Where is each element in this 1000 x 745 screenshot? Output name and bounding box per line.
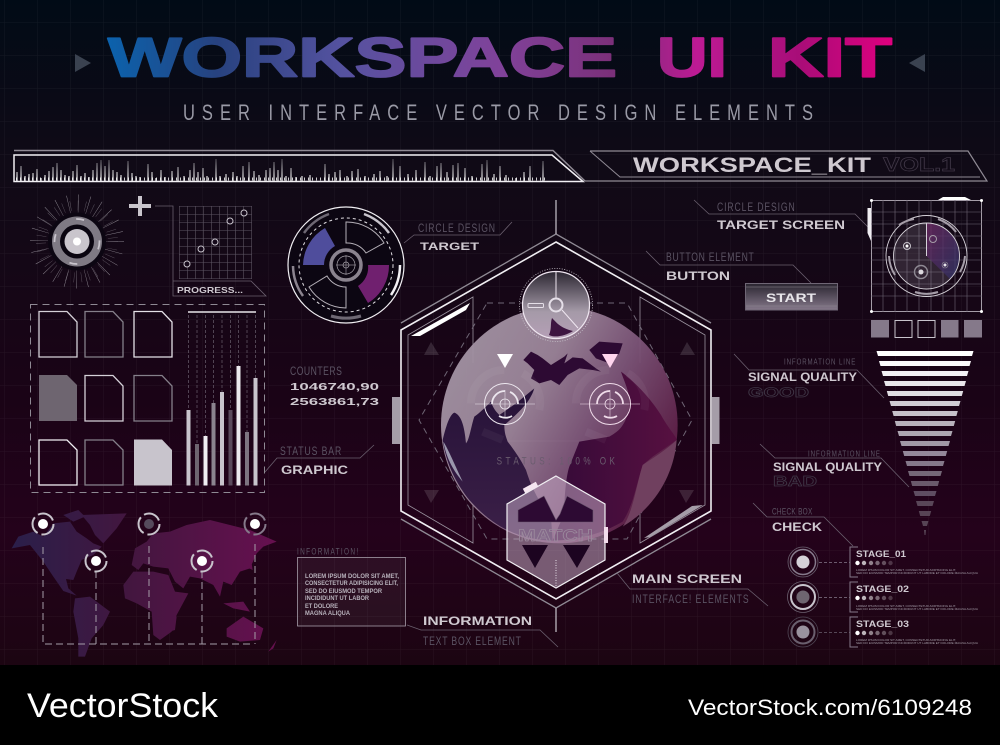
footer bar — [0, 665, 1000, 745]
label: check — [753, 503, 853, 546]
title: KIT — [768, 26, 892, 88]
label: information: INFORMATION — [423, 616, 532, 628]
match hexagon: MATCH — [518, 526, 593, 545]
stage 03: LOREM IPSUM DOLOR SIT AMET, CONSECTETUR ADIPISICING ELIT, — [856, 638, 956, 642]
counters: 2563861,73 — [290, 396, 379, 408]
world map — [12, 510, 277, 657]
label: signal quality good: GOOD — [748, 384, 809, 400]
top lens — [520, 268, 592, 342]
information box: CONSECTETUR ADIPISICING ELIT, — [305, 580, 398, 587]
icon: plus — [129, 196, 151, 216]
main screen hexagon — [392, 200, 720, 632]
right target — [580, 384, 640, 424]
label: target screen: TARGET SCREEN — [717, 220, 845, 232]
counters: COUNTERS — [290, 366, 342, 378]
counters: 1046740,90 — [290, 381, 379, 393]
hexagon frame — [401, 200, 711, 632]
title — [108, 26, 892, 88]
label: main screen: INTERFACE! ELEMENTS — [632, 594, 749, 606]
stage 01: SED DO EIUSMOD TEMPOR INCIDIDUNT UT LABORE ET DOLORE MAGNA ALIQUA — [856, 571, 978, 575]
workspace kit label — [585, 151, 987, 181]
black sea — [589, 342, 623, 363]
button: start: START — [766, 293, 816, 305]
marker triangles — [497, 354, 618, 368]
information box: INCIDIDUNT UT LABOR — [305, 595, 369, 602]
highlights — [411, 303, 470, 336]
label: target: TARGET — [420, 241, 479, 253]
stage 02: STAGE_02 — [856, 584, 909, 594]
label: target screen — [694, 200, 872, 232]
label: target — [404, 222, 512, 253]
information box: INFORMATION! — [297, 546, 358, 557]
workspace kit label: VOL.1 — [883, 155, 956, 176]
left target — [475, 384, 535, 424]
signal funnel — [876, 351, 974, 535]
footer bar: VectorStock — [27, 687, 219, 725]
target screen radar — [868, 197, 983, 313]
workspace kit label: WORKSPACE_KIT — [633, 154, 871, 177]
label: signal quality good: SIGNAL QUALITY — [748, 372, 857, 384]
title: UI — [657, 26, 727, 88]
atlantic ocean — [443, 388, 553, 541]
match hexagon — [507, 476, 608, 588]
stage 02: SED DO EIUSMOD TEMPOR INCIDIDUNT UT LABORE ET DOLORE MAGNA ALIQUA — [856, 607, 978, 611]
label: check: CHECK BOX — [772, 506, 813, 517]
information box — [297, 546, 406, 626]
label: graphic status bar — [265, 445, 374, 477]
label: signal quality bad: INFORMATION LINE — [808, 448, 880, 459]
circle target gauge — [288, 207, 404, 323]
globe — [441, 307, 678, 543]
stage 03: STAGE_03 — [856, 619, 909, 629]
stage 01: LOREM IPSUM DOLOR SIT AMET, CONSECTETUR ADIPISICING ELIT, — [856, 568, 956, 572]
label: button: BUTTON ELEMENT — [666, 252, 754, 264]
label: main screen — [617, 573, 768, 606]
label: target: CIRCLE DESIGN — [418, 223, 495, 235]
label: graphic status bar: GRAPHIC — [281, 465, 348, 477]
status text: STATUS: 100% OK — [497, 455, 615, 468]
label: signal quality good: INFORMATION LINE — [784, 356, 855, 367]
label: information — [407, 616, 558, 648]
icon: radial burst — [39, 204, 115, 280]
map pins — [32, 514, 266, 572]
upper right land tint — [553, 372, 677, 541]
stage 01 — [788, 547, 978, 577]
ghost arcs — [471, 370, 645, 440]
information box: SED DO EIUSMOD TEMPOR — [305, 588, 382, 595]
dashed drop lines — [43, 544, 255, 644]
title: WORKSPACE — [108, 26, 617, 88]
corner triangles — [424, 342, 695, 503]
top equalizer bar — [14, 150, 585, 182]
continents — [12, 510, 277, 657]
label: check: CHECK — [772, 522, 823, 534]
stage 01: STAGE_01 — [856, 549, 906, 559]
information box: LOREM IPSUM DOLOR SIT AMET, — [305, 573, 399, 580]
label: signal quality good — [734, 354, 884, 400]
information box: MAGNA ALIQUA — [305, 610, 350, 617]
status squares — [871, 320, 982, 338]
label: button: BUTTON — [666, 271, 730, 283]
label: signal quality bad — [760, 444, 909, 490]
file icons grid — [39, 312, 172, 486]
label: graphic status bar: STATUS BAR — [280, 446, 342, 458]
footer bar: VectorStock.com/6109248 — [688, 695, 972, 720]
chart: progress scatter: PROGRESS... — [177, 285, 243, 295]
lower right land — [623, 440, 677, 527]
label: information: TEXT BOX ELEMENT — [423, 636, 521, 648]
information box: ET DOLORE — [305, 603, 338, 610]
stage 03: SED DO EIUSMOD TEMPOR INCIDIDUNT UT LABORE ET DOLORE MAGNA ALIQUA — [856, 641, 978, 645]
counters — [290, 366, 379, 408]
stage 02 — [788, 582, 978, 612]
panel: documents and bar chart — [30, 304, 264, 492]
label: signal quality bad: BAD — [773, 473, 817, 490]
label: signal quality bad: SIGNAL QUALITY — [773, 462, 882, 474]
label: target screen: CIRCLE DESIGN — [717, 202, 795, 214]
mediterranean — [523, 352, 601, 385]
south american coast specks — [443, 442, 463, 482]
button: start — [746, 284, 838, 310]
subtitle: USER INTERFACE VECTOR DESIGN ELEMENTS — [183, 101, 813, 126]
label: button — [646, 251, 811, 283]
stage 02: LOREM IPSUM DOLOR SIT AMET, CONSECTETUR ADIPISICING ELIT, — [856, 604, 956, 608]
side tabs — [392, 397, 720, 444]
chart: progress scatter — [155, 206, 266, 296]
stage 03 — [788, 617, 978, 647]
title arrows — [75, 54, 925, 72]
label: main screen: MAIN SCREEN — [632, 574, 742, 586]
bar chart — [186, 312, 258, 486]
